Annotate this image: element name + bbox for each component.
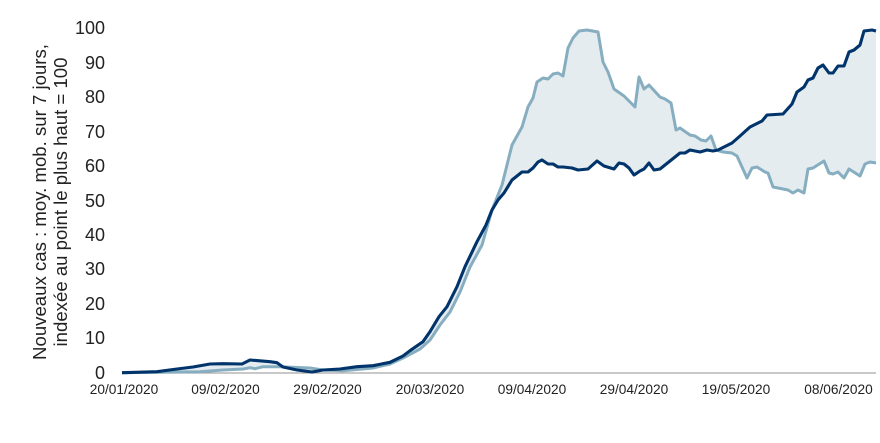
shaded gap between the two series xyxy=(122,30,876,373)
series: light blue line xyxy=(122,30,876,373)
y axis tick labels: 50 xyxy=(85,191,105,211)
y axis tick labels: 80 xyxy=(85,87,105,107)
x axis date labels: 19/05/2020 xyxy=(702,382,771,397)
y axis tick labels: 20 xyxy=(85,294,105,314)
y axis tick labels: 60 xyxy=(85,156,105,176)
y axis title: indexée au point le plus haut = 100 xyxy=(50,58,71,346)
x axis line xyxy=(122,372,876,374)
x axis date labels: 20/01/2020 xyxy=(90,382,159,397)
y axis tick labels: 0 xyxy=(95,363,105,383)
y axis tick labels: 70 xyxy=(85,122,105,142)
y axis tick labels: 40 xyxy=(85,225,105,245)
y axis tick labels xyxy=(75,18,105,383)
x axis date labels: 09/04/2020 xyxy=(498,382,567,397)
x axis date labels: 08/06/2020 xyxy=(804,382,873,397)
y axis tick labels: 90 xyxy=(85,53,105,73)
x axis date labels: 29/04/2020 xyxy=(600,382,669,397)
x axis date labels: 29/02/2020 xyxy=(293,382,362,397)
series: dark blue line xyxy=(122,30,876,373)
y axis title: Nouveaux cas : moy. mob. sur 7 jours, xyxy=(29,44,50,360)
x axis date labels: 20/03/2020 xyxy=(396,382,465,397)
x axis date labels xyxy=(90,382,873,397)
y axis tick labels: 10 xyxy=(85,328,105,348)
y axis tick labels: 30 xyxy=(85,259,105,279)
x axis date labels: 09/02/2020 xyxy=(191,382,260,397)
y axis tick labels: 100 xyxy=(75,18,105,38)
y axis title xyxy=(29,44,71,360)
